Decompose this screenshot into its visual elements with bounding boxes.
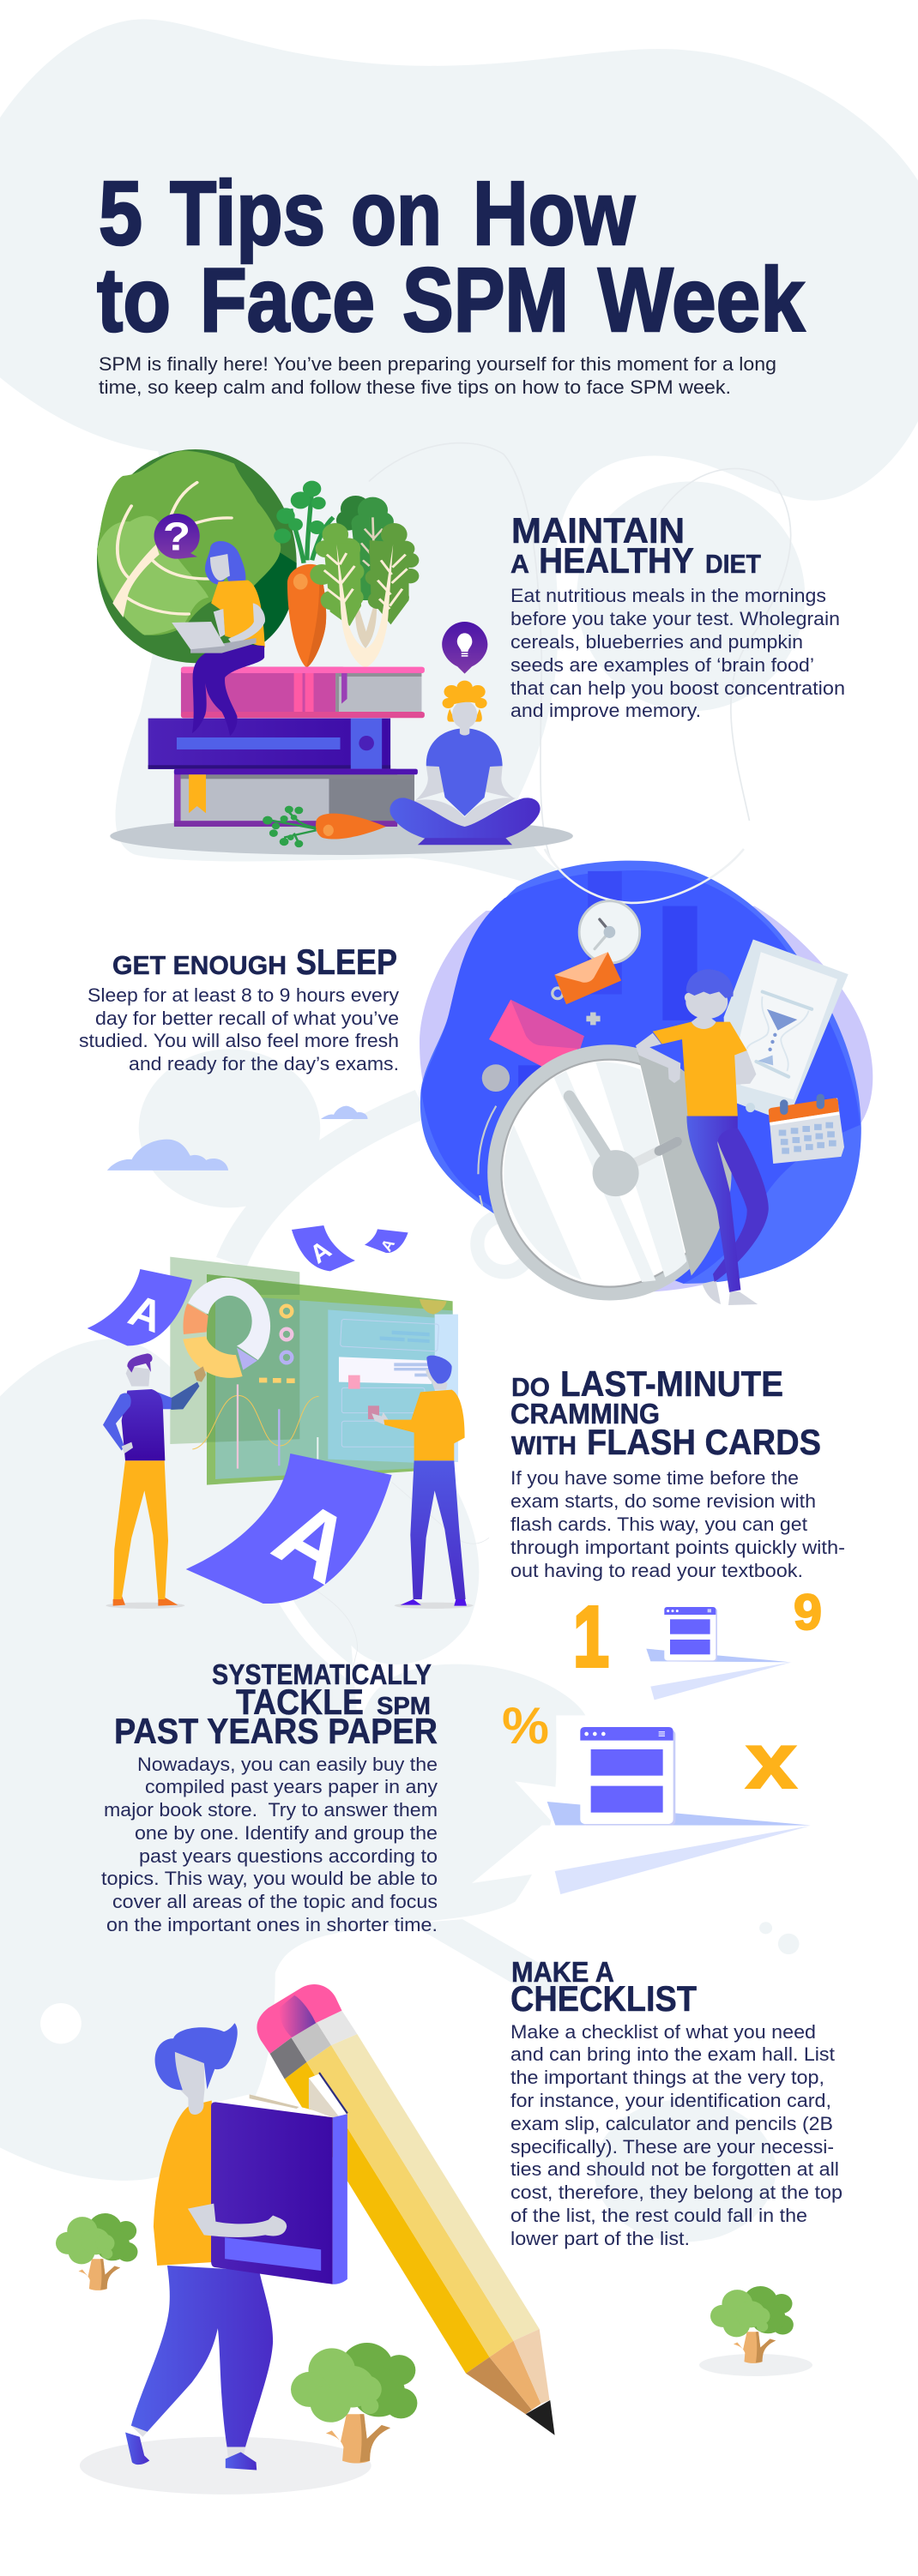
- thin decorative line: [315, 443, 791, 1672]
- icon: tree right: [710, 2286, 794, 2363]
- icon: clouds: [107, 1106, 368, 1171]
- man with watch: [636, 969, 769, 1305]
- legend dashes: [259, 1378, 295, 1383]
- icon: flying A paper small: [365, 1229, 408, 1255]
- icon: plus: [586, 1013, 601, 1025]
- motion marks: [478, 1106, 496, 1206]
- white arc line: [545, 849, 744, 903]
- title: Tips: [170, 163, 325, 264]
- text: past years paper: one by one. Identify and group the: [135, 1822, 438, 1844]
- text: sleep: Sleep for at least 8 to 9 hours every: [88, 984, 400, 1006]
- text: checklist: cost, therefore, they belong at the top: [510, 2182, 843, 2203]
- heading: maintain a healthy diet: A: [510, 549, 529, 579]
- heading: make a checklist: [510, 1956, 697, 2019]
- text: healthy diet: that can help you boost concentration: [510, 677, 845, 699]
- ground shadow: [80, 2437, 371, 2495]
- illustration: sleep clock: [420, 849, 873, 1305]
- icon: large A paper: A: [257, 1478, 370, 1604]
- icon: flying A paper left: [88, 1269, 192, 1345]
- book stack: [148, 667, 425, 827]
- text: checklist: the important things at the very top,: [510, 2067, 824, 2088]
- book: [211, 2073, 347, 2284]
- text: past years paper: cover all areas of the topic and focus: [112, 1891, 438, 1912]
- icon: carrot with greens: [274, 481, 334, 667]
- heading: maintain a healthy diet: MAINTAIN: [511, 510, 685, 551]
- heading: last-minute cramming: DO: [511, 1372, 550, 1402]
- text: past years paper: topics. This way, you would be able to: [101, 1868, 438, 1889]
- lavender blob: [420, 906, 873, 1292]
- text: past years paper: on the important ones in shorter time.: [106, 1914, 438, 1935]
- pink book: [181, 667, 425, 718]
- text: past years paper: compiled past years paper in any: [145, 1776, 438, 1797]
- text: checklist: of the list, the rest could fall in the: [510, 2205, 807, 2226]
- heading: last-minute cramming: [510, 1363, 821, 1462]
- heading: last-minute cramming: FLASH CARDS: [587, 1422, 821, 1462]
- icon: tree beside pencil: [291, 2343, 417, 2463]
- window 2: [580, 1727, 675, 1826]
- heading: past years paper: TACKLE: [236, 1682, 364, 1722]
- title: to: [97, 250, 171, 351]
- text: sleep: [79, 984, 400, 1074]
- text: healthy diet: and improve memory.: [510, 700, 701, 721]
- icon: small clock: [579, 901, 640, 963]
- donut chart: [183, 1278, 270, 1378]
- text: checklist: [510, 2021, 843, 2249]
- text: checklist: Make a checklist of what you need: [510, 2021, 816, 2043]
- shirt: [154, 2100, 214, 2266]
- icon: grey dot: [482, 1064, 510, 1092]
- heading: get enough sleep: GET ENOUGH: [112, 950, 287, 980]
- icon: tree small left: [56, 2213, 137, 2290]
- heading: past years paper: SYSTEMATICALLY: [212, 1658, 432, 1690]
- icon: calendar: [769, 1094, 844, 1164]
- text: checklist: and can bring into the exam hall. List: [510, 2043, 836, 2065]
- illustration: flash cards dashboard: [88, 1225, 474, 1609]
- text: checklist: lower part of the list.: [510, 2228, 690, 2249]
- illustration: healthy diet: [97, 449, 573, 855]
- man at screen: [371, 1356, 474, 1609]
- heading: last-minute cramming: LAST-MINUTE: [560, 1363, 783, 1404]
- intro text: SPM is finally here! You’ve been preparing yourself for this moment for a long: [99, 353, 776, 375]
- text: healthy diet: cereals, blueberries and pumpkin: [510, 631, 803, 653]
- title: SPM: [402, 250, 569, 351]
- icon: flying A paper left: A: [123, 1285, 170, 1342]
- text: past years paper: major book store. Try to answer them: [104, 1799, 438, 1821]
- heading: last-minute cramming: WITH: [511, 1430, 577, 1460]
- grey book: [174, 769, 418, 827]
- floating number 1: 1: [573, 1589, 609, 1685]
- text: flash cards: If you have some time before the: [510, 1467, 799, 1489]
- icon: cabbage: [97, 449, 297, 663]
- icon: question bubble: [154, 514, 200, 559]
- text: flash cards: through important points quickly with-: [510, 1537, 845, 1558]
- icon: tablet with hourglass: [724, 939, 849, 1122]
- ground shadow: [110, 817, 573, 855]
- title: Week: [598, 250, 806, 351]
- text: checklist: specifically). These are your necessi-: [510, 2136, 834, 2158]
- text: healthy diet: [510, 585, 845, 721]
- icon: flying A paper small: A: [377, 1236, 398, 1255]
- icon: large A paper: [186, 1454, 392, 1604]
- icon: pink envelope: [489, 1000, 584, 1077]
- text: healthy diet: Eat nutritious meals in the mornings: [510, 585, 826, 606]
- text: flash cards: flash cards. This way, you can get: [510, 1514, 808, 1535]
- icon: question bubble: ?: [163, 515, 190, 559]
- small donut charts: [281, 1306, 292, 1363]
- heading: maintain a healthy diet: DIET: [705, 549, 761, 579]
- icon: carrot on ground: [263, 806, 386, 847]
- window 1: [664, 1607, 717, 1661]
- heading: past years paper: [114, 1658, 438, 1751]
- text: checklist: for instance, your identification card,: [510, 2090, 831, 2111]
- text: healthy diet: before you take your test. Wholegrain: [510, 608, 840, 629]
- text: sleep: studied. You will also feel more fresh: [79, 1030, 399, 1051]
- pale ring: [477, 1216, 532, 1272]
- text: flash cards: [510, 1467, 845, 1581]
- title: Face: [200, 250, 375, 351]
- title: 5: [99, 163, 142, 264]
- text: flash cards: exam starts, do some revision with: [510, 1490, 816, 1512]
- dashboard panel: [207, 1274, 458, 1485]
- illustration: pencil and student: [80, 1984, 555, 2495]
- paper planes with windows: [472, 1607, 811, 1894]
- title: [97, 163, 806, 351]
- icon: large stopwatch: [487, 1044, 732, 1301]
- icon: orange envelope: [553, 952, 621, 1004]
- icon: flying A paper top: A: [305, 1236, 336, 1269]
- woman with laptop: [172, 541, 265, 736]
- title: on: [351, 163, 442, 264]
- floating number 9: 9: [794, 1585, 822, 1640]
- heading: past years paper: PAST YEARS PAPER: [114, 1711, 438, 1751]
- icon: leafy greens: [310, 496, 419, 667]
- heading: get enough sleep: [112, 942, 397, 982]
- man pointing at chart: [103, 1353, 206, 1609]
- tree shadow: [699, 2354, 812, 2376]
- title: How: [473, 163, 635, 264]
- blue blob: [420, 861, 861, 1284]
- text: checklist: ties and should not be forgotten at all: [510, 2158, 839, 2180]
- text: sleep: day for better recall of what you’ve: [95, 1008, 399, 1029]
- icon: flying A paper top: [292, 1225, 355, 1271]
- heading: maintain a healthy diet: [510, 510, 761, 581]
- text: healthy diet: seeds are examples of ‘brain food’: [510, 654, 814, 676]
- arm: [188, 2204, 287, 2237]
- plane 2: [472, 1781, 811, 1894]
- man reading: [390, 681, 541, 845]
- pale green back panel: [170, 1257, 299, 1444]
- student with book: [125, 2023, 347, 2470]
- text: past years paper: Nowadays, you can easily buy the: [137, 1754, 438, 1775]
- indigo book: [148, 719, 390, 769]
- icon: lightbulb bubble: [442, 622, 487, 674]
- heading: make a checklist: MAKE A: [511, 1956, 614, 1988]
- text: past years paper: past years questions according to: [139, 1845, 438, 1867]
- text: past years paper: [101, 1754, 438, 1935]
- heading: make a checklist: CHECKLIST: [510, 1978, 697, 2019]
- line chart: [192, 1384, 319, 1469]
- heading: get enough sleep: SLEEP: [296, 942, 397, 982]
- floating letter x: x: [746, 1718, 797, 1805]
- heading: maintain a healthy diet: HEALTHY: [539, 540, 694, 581]
- text: checklist: exam slip, calculator and pencils (2B: [510, 2113, 833, 2134]
- icon: giant pencil: [257, 1984, 555, 2435]
- text: flash cards: out having to read your textbook.: [510, 1560, 803, 1581]
- heading: last-minute cramming: CRAMMING: [510, 1398, 660, 1429]
- heading: past years paper: SPM: [377, 1693, 431, 1720]
- head: [174, 2052, 205, 2115]
- intro text: [99, 353, 776, 398]
- plane 1: [629, 1637, 792, 1700]
- text: sleep: and ready for the day’s exams.: [129, 1053, 399, 1074]
- floating percent sign: %: [502, 1697, 549, 1754]
- intro text: time, so keep calm and follow these five tips on how to face SPM week.: [99, 376, 731, 398]
